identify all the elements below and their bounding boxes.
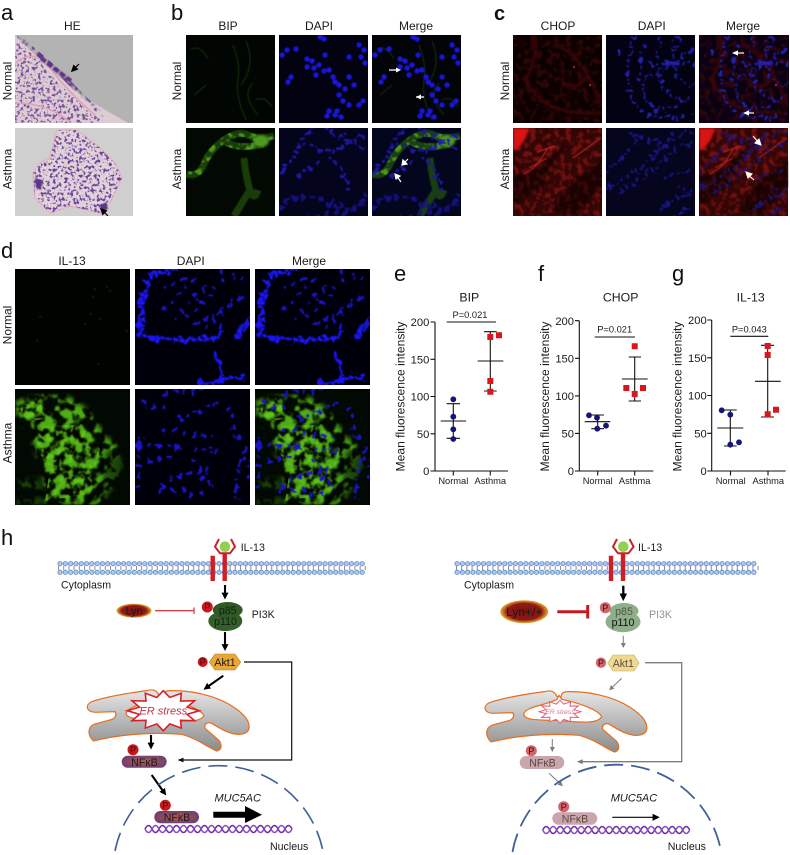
row label Normal: Normal <box>0 62 14 100</box>
arrow ER to NFkB <box>150 735 152 744</box>
label c: c <box>494 3 505 25</box>
arrow Akt1 to ER <box>208 676 223 686</box>
significance bar: P=0.021 <box>453 310 487 320</box>
panel h: left signalling pathway <box>1 525 367 853</box>
Akt1: Akt1 <box>214 657 236 669</box>
heading CHOP: CHOP <box>541 19 575 33</box>
arrow NFkB to nucleus <box>549 773 560 784</box>
endoplasmic reticulum <box>87 690 249 751</box>
nuclear envelope <box>512 765 721 852</box>
NFkB nucleus <box>552 801 597 825</box>
arrow NFkB to nucleus <box>152 775 163 791</box>
HE image asthma <box>15 128 133 216</box>
panel b: BIP immunofluorescence <box>170 0 461 216</box>
head of Akt1 to NFkB arrow <box>577 759 583 764</box>
PI3K complex: P <box>204 602 210 612</box>
DAPI normal image <box>135 269 250 385</box>
y tick labels: 100 <box>411 392 429 404</box>
Akt1 <box>596 655 639 671</box>
Merge normal image <box>372 35 461 123</box>
y tick labels: 50 <box>562 428 574 440</box>
row label Normal: Normal <box>0 306 14 344</box>
y tick labels: 150 <box>555 353 574 365</box>
Cytoplasm label: Cytoplasm <box>464 579 514 591</box>
transcription arrow thin <box>612 816 654 818</box>
nuclear envelope <box>115 766 323 851</box>
row label Asthma: Asthma <box>170 148 184 189</box>
arrow <box>104 212 108 216</box>
heading DAPI: DAPI <box>638 19 666 33</box>
Merge normal image <box>699 35 789 123</box>
y tick labels: 50 <box>694 428 707 440</box>
heading DAPI: DAPI <box>177 254 205 268</box>
PI3K label: PI3K <box>649 609 672 621</box>
Akt1 <box>198 654 241 670</box>
y tick labels: 100 <box>555 391 574 403</box>
axes and ticks <box>575 321 653 476</box>
head of Akt1 to NFkB arrow <box>178 758 184 762</box>
chart f: CHOP dot plot <box>538 261 653 486</box>
normal group points <box>585 412 610 432</box>
ER stress burst: ER stress <box>139 706 188 718</box>
DAPI asthma image <box>279 128 368 216</box>
significance bar <box>447 310 496 322</box>
y axis label: Mean fluorescence intensity <box>538 321 552 471</box>
PI3K complex: p85 <box>219 605 237 617</box>
label g: g <box>672 261 684 286</box>
DAPI asthma image <box>135 389 250 505</box>
Merge asthma image <box>255 389 370 505</box>
label b: b <box>171 0 183 25</box>
heading Merge: Merge <box>399 19 433 33</box>
x tick labels: Normal <box>716 476 746 486</box>
x tick labels: Asthma <box>753 476 785 486</box>
y tick labels: 200 <box>555 316 574 328</box>
DNA <box>543 826 690 834</box>
x tick labels <box>438 476 507 486</box>
Akt1: P <box>598 658 604 668</box>
Merge asthma image <box>372 128 461 216</box>
panel h: right signalling pathway <box>456 539 759 853</box>
y axis label: Mean fluorescence intensity <box>394 321 408 471</box>
x tick labels <box>716 476 785 486</box>
heading DAPI: DAPI <box>305 19 333 33</box>
PI3K complex <box>202 602 243 631</box>
ER stress burst <box>539 700 581 723</box>
normal group points <box>441 396 466 442</box>
cell membrane <box>58 564 367 572</box>
MUC5AC label: MUC5AC <box>611 792 657 804</box>
chart title: BIP <box>459 290 479 304</box>
row label Asthma: Asthma <box>498 148 512 189</box>
y axis label: Mean fluorescence intensity <box>670 321 684 471</box>
DAPI normal image <box>606 35 695 123</box>
IL-13 label: IL-13 <box>638 542 662 554</box>
asthma group points <box>478 332 503 395</box>
chart title: IL-13 <box>737 290 765 304</box>
panel a: HE histology <box>0 0 133 216</box>
arrow PI3K to Akt1 <box>622 636 624 644</box>
chart e: BIP dot plot <box>394 261 508 486</box>
arrow <box>75 64 79 68</box>
Akt1: P <box>200 657 206 667</box>
Lyn: Lyn <box>126 606 142 618</box>
asthma group points <box>622 343 648 401</box>
cell membrane <box>456 564 759 572</box>
transcription arrow large <box>213 806 262 823</box>
arrow Akt1 to NFkB <box>580 663 682 762</box>
PI3K complex: p110 <box>612 617 634 629</box>
heading HE: HE <box>64 19 81 33</box>
y tick labels: 200 <box>688 315 707 327</box>
chart g: IL-13 dot plot <box>670 261 786 486</box>
Merge asthma image <box>699 128 789 216</box>
axes and ticks <box>707 320 786 476</box>
Merge normal image <box>255 269 370 385</box>
y tick labels <box>411 317 429 478</box>
Lyn+/+: Lyn+/+ <box>506 605 542 619</box>
y tick labels: 0 <box>568 466 574 478</box>
y tick labels <box>688 315 707 478</box>
x tick labels <box>583 476 651 486</box>
NFkB cytoplasm <box>520 745 564 770</box>
arrow PI3K to Akt1 <box>224 632 226 646</box>
label f: f <box>538 261 545 286</box>
Cytoplasm label: Cytoplasm <box>61 579 111 591</box>
NFkB cytoplasm: P <box>528 746 534 756</box>
label e: e <box>394 261 406 286</box>
label d: d <box>1 238 13 263</box>
significance bar: P=0.043 <box>732 324 767 334</box>
row label Normal: Normal <box>498 62 512 100</box>
row label Normal: Normal <box>170 62 184 100</box>
axes and ticks <box>430 322 508 476</box>
heading BIP: BIP <box>218 19 238 33</box>
NFkB nucleus: P <box>561 802 567 812</box>
arrow receptor to PI3K <box>224 585 226 594</box>
PI3K complex <box>600 602 640 632</box>
BIP normal image <box>186 35 275 123</box>
y tick labels: 100 <box>688 390 707 402</box>
IL-13 label: IL-13 <box>241 542 265 554</box>
PI3K complex: p110 <box>214 616 237 628</box>
arrow receptor to PI3K <box>622 586 624 595</box>
x tick labels: Asthma <box>619 476 651 486</box>
label a: a <box>1 0 14 25</box>
y tick labels: 150 <box>411 354 429 366</box>
NFkB nucleus: P <box>162 801 168 811</box>
Lyn <box>116 604 152 618</box>
CHOP asthma image <box>513 128 602 216</box>
NFkB cytoplasm: P <box>130 745 136 755</box>
PI3K label: PI3K <box>252 609 275 621</box>
heading Merge: Merge <box>726 19 760 33</box>
Akt1: Akt1 <box>613 658 634 670</box>
NFkB nucleus: NFκB <box>164 812 190 824</box>
y tick labels: 50 <box>417 429 429 441</box>
y tick labels: 150 <box>688 353 707 365</box>
heading Merge: Merge <box>292 254 326 268</box>
HE image normal <box>15 35 133 123</box>
NFkB cytoplasm: NFκB <box>131 757 158 769</box>
IL-13 receptor <box>611 539 634 581</box>
IL-13 asthma image <box>15 389 130 505</box>
ER stress burst <box>127 691 199 731</box>
DAPI normal image <box>279 35 368 123</box>
label h: h <box>1 525 13 550</box>
arrow Akt1 to NFkB <box>181 662 292 760</box>
x tick labels: Asthma <box>475 476 507 486</box>
CHOP normal image <box>513 35 602 123</box>
PI3K complex: P <box>602 603 608 613</box>
MUC5AC label: MUC5AC <box>214 792 261 804</box>
panel d: IL-13 immunofluorescence <box>0 238 370 505</box>
x tick labels: Normal <box>583 476 613 486</box>
inhibition Lyn to PI3K <box>155 608 194 614</box>
significance bar: P=0.021 <box>597 324 632 334</box>
Nucleus label: Nucleus <box>668 841 706 853</box>
DNA <box>145 826 292 832</box>
significance bar <box>595 324 635 337</box>
heading IL-13: IL-13 <box>58 254 86 268</box>
BIP asthma image <box>186 128 275 216</box>
row label Asthma: Asthma <box>0 148 14 189</box>
row label Asthma: Asthma <box>0 422 14 463</box>
ER stress burst: ER stress <box>545 709 575 716</box>
Lyn+/+ <box>500 600 548 623</box>
y tick labels <box>555 316 574 478</box>
IL-13 normal image <box>15 269 130 385</box>
endoplasmic reticulum <box>485 691 647 752</box>
y tick labels: 0 <box>423 466 429 478</box>
arrow ER to NFkB <box>551 739 553 748</box>
chart title: CHOP <box>603 290 638 304</box>
IL-13 receptor <box>213 539 235 581</box>
x tick labels: Normal <box>438 476 468 486</box>
asthma group points <box>755 343 781 417</box>
normal group points <box>717 407 743 448</box>
arrow Akt1 to ER <box>612 678 622 688</box>
y tick labels: 0 <box>700 466 707 478</box>
y tick labels: 200 <box>411 317 429 329</box>
panel c: CHOP immunofluorescence <box>494 3 789 216</box>
NFkB nucleus <box>154 800 199 824</box>
NFkB nucleus: NFκB <box>562 813 588 825</box>
NFkB cytoplasm: NFκB <box>529 758 556 770</box>
inhibition Lyn to PI3K <box>557 605 588 618</box>
PI3K complex: p85 <box>615 606 633 618</box>
NFkB cytoplasm <box>122 744 167 769</box>
Nucleus label: Nucleus <box>270 841 308 853</box>
DAPI asthma image <box>606 128 695 216</box>
